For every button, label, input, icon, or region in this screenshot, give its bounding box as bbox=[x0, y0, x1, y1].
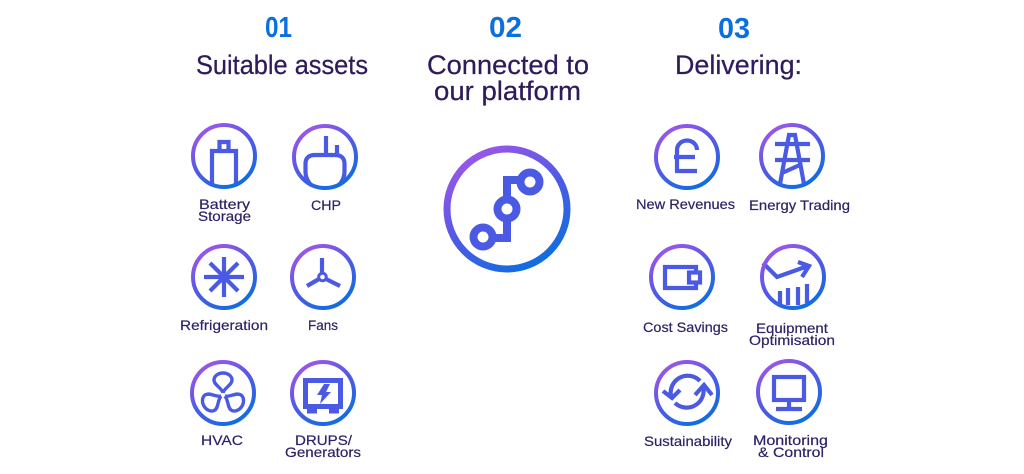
column 3: delivering bbox=[636, 13, 850, 460]
label: sustainability: Sustainability bbox=[644, 433, 732, 449]
label: fans: Fans bbox=[308, 317, 338, 333]
number 01: 01 bbox=[265, 12, 292, 44]
heading: suitable assets: Suitable assets bbox=[196, 50, 368, 80]
label: CHP: CHP bbox=[311, 197, 341, 213]
icon: platform connection bbox=[447, 149, 567, 269]
icon: refrigeration bbox=[193, 246, 255, 308]
icon: energy trading bbox=[761, 125, 823, 187]
icon: battery storage bbox=[193, 125, 255, 187]
label: equipment optimisation: Equipment bbox=[756, 320, 828, 336]
heading: connected to our platform: Connected to bbox=[427, 50, 589, 80]
label: monitoring and control: & Control bbox=[758, 444, 824, 460]
heading: connected to our platform bbox=[427, 50, 589, 106]
label: energy trading: Energy Trading bbox=[749, 197, 850, 213]
number 03: 03 bbox=[718, 13, 750, 45]
label: monitoring and control bbox=[753, 432, 828, 460]
label: battery storage: Storage bbox=[198, 208, 251, 224]
label: new revenues: New Revenues bbox=[636, 196, 735, 212]
label: DRUPS / generators: Generators bbox=[285, 444, 361, 460]
icon: monitoring and control bbox=[758, 361, 820, 423]
icon: cost savings bbox=[651, 246, 713, 308]
column 2: connected to our platform bbox=[427, 12, 589, 269]
icon: fans bbox=[292, 246, 354, 308]
label: DRUPS / generators bbox=[285, 432, 361, 460]
label: HVAC: HVAC bbox=[201, 432, 243, 448]
label: battery storage: Battery bbox=[199, 196, 250, 212]
label: refrigeration: Refrigeration bbox=[180, 317, 268, 333]
label: equipment optimisation: Optimisation bbox=[749, 332, 835, 348]
label: monitoring and control: Monitoring bbox=[753, 432, 828, 448]
label: cost savings: Cost Savings bbox=[643, 319, 728, 335]
icon: equipment optimisation bbox=[762, 246, 824, 308]
icon: sustainability bbox=[656, 362, 718, 424]
label: battery storage bbox=[198, 196, 251, 224]
heading: connected to our platform: our platform bbox=[434, 76, 581, 106]
icon: DRUPS / generators bbox=[292, 362, 354, 424]
icon: HVAC bbox=[192, 362, 254, 424]
number 02: 02 bbox=[489, 12, 522, 44]
icon: CHP bbox=[294, 126, 356, 188]
label: equipment optimisation bbox=[749, 320, 835, 348]
label: DRUPS / generators: DRUPS/ bbox=[295, 432, 352, 448]
column 1: suitable assets bbox=[180, 12, 368, 460]
heading: delivering: Delivering: bbox=[675, 50, 802, 80]
icon: new revenues bbox=[656, 126, 718, 188]
